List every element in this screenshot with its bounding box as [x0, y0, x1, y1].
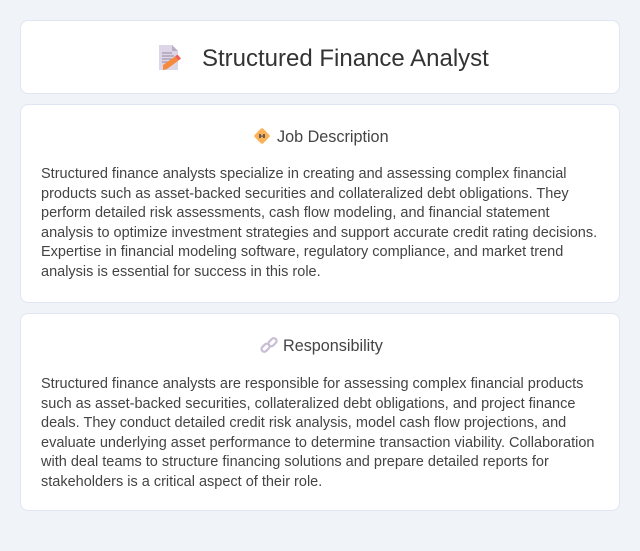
text: responsibility [41, 376, 594, 490]
text: job description: analysis is essential for success in this role. [41, 264, 321, 280]
icon: document with pencil [159, 45, 181, 70]
heading: responsibility: Responsibility [283, 336, 383, 354]
text: responsibility: deals. They conduct detailed credit risk analysis, model cash flow projections, and [41, 415, 566, 431]
text: job description: products such as asset-backed securities and collateralized debt obligations. They [41, 186, 569, 202]
text: responsibility: evaluate underlying asset performance to determine transaction viability. Collaboration [41, 435, 594, 451]
text: responsibility: Structured finance analysts are responsible for assessing complex financial products [41, 376, 583, 392]
title: Structured Finance Analyst [202, 45, 489, 72]
text: responsibility: stakeholders is a critical aspect of their role. [41, 474, 322, 490]
text: job description: Structured finance analysts specialize in creating and assessing complex financial [41, 166, 567, 182]
panel: job description [20, 104, 620, 303]
text: job description: analysis to optimize investment strategies and support accurate credit rating decisions. [41, 225, 597, 241]
text: job description: Expertise in financial modeling software, regulatory compliance, and market trend [41, 244, 563, 260]
text: job description [41, 166, 597, 280]
icon: orange diamond [254, 128, 270, 144]
icon: chain link [260, 337, 278, 353]
text: responsibility: such as asset-backed securities, collateralized debt obligations, and project finance [41, 396, 575, 412]
text: responsibility: with deal teams to structure financing solutions and prepare detailed reports for [41, 454, 549, 470]
text: job description: perform detailed risk assessments, cash flow modeling, and financial statement [41, 205, 550, 221]
panel: responsibility [20, 313, 620, 511]
panel: title card [20, 20, 620, 94]
heading: job description: Job Description [277, 128, 389, 146]
